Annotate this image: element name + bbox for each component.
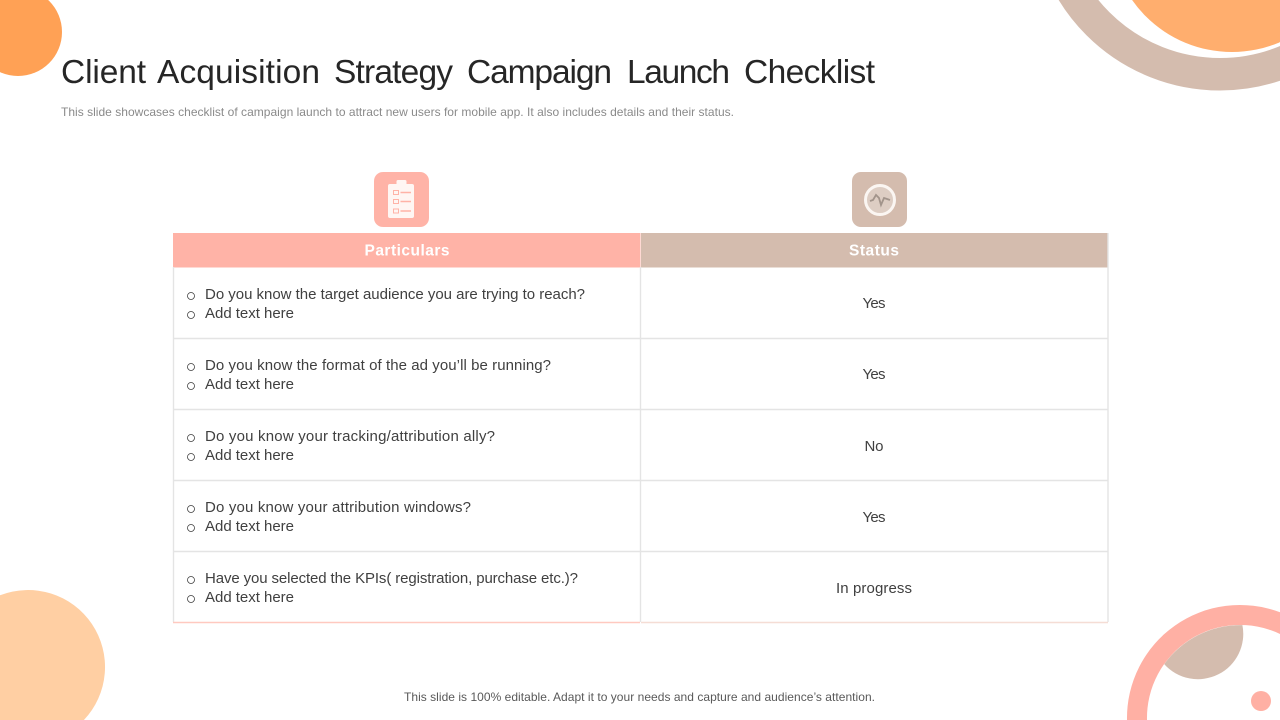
row 5: Add text here	[205, 589, 294, 606]
title: Campaign	[467, 54, 612, 91]
row 1: Yes	[862, 295, 886, 312]
title: Acquisition	[157, 54, 320, 91]
decoration: bottom-right small pink dot	[1251, 691, 1271, 711]
row 1	[188, 286, 886, 322]
title: Client	[61, 54, 147, 91]
row 1: Do you know the target audience you are trying to reach?	[205, 286, 585, 303]
row 2: Do you know the format of the ad you’ll be running?	[205, 357, 551, 374]
row 2	[188, 357, 886, 393]
row 4	[188, 499, 886, 535]
row 2: Add text here	[205, 376, 294, 393]
decoration: top-left orange circle	[0, 0, 62, 76]
row 3: Do you know your tracking/attribution ally?	[205, 428, 495, 445]
decoration: bottom-right pink ring	[1127, 605, 1280, 720]
row 1: Add text here	[205, 305, 294, 322]
footer note: This slide is 100% editable. Adapt it to your needs and capture and audience’s attention.	[404, 690, 875, 704]
decoration: bottom-left peach circle	[0, 590, 105, 720]
row 3: Add text here	[205, 447, 294, 464]
decoration: bottom-right tan circle	[1164, 625, 1243, 679]
decoration: top-right orange circle	[1110, 0, 1280, 52]
subtitle: This slide showcases checklist of campaign launch to attract new users for mobile app. It also includes details and their status.	[61, 105, 734, 119]
row 4: Yes	[862, 509, 886, 526]
title: Launch	[627, 54, 730, 91]
row 4: Do you know your attribution windows?	[205, 499, 471, 516]
row 4: Add text here	[205, 518, 294, 535]
icon: status pulse	[852, 172, 907, 227]
row 5: Have you selected the KPIs( registration, purchase etc.)?	[205, 570, 578, 587]
table header: Status: Status	[849, 242, 899, 260]
title: Strategy	[334, 54, 453, 91]
icon: clipboard checklist	[374, 172, 429, 227]
row 5	[188, 570, 912, 606]
table header: Status	[641, 233, 1108, 268]
row 3	[188, 428, 884, 464]
row 5: In progress	[836, 580, 912, 597]
table header: Particulars: Particulars	[364, 242, 450, 260]
decoration: top-right tan ring	[1047, 0, 1280, 74]
table grid lines	[173, 233, 1108, 622]
table header: Particulars	[173, 233, 640, 268]
row 3: No	[864, 438, 884, 455]
row 2: Yes	[862, 366, 886, 383]
table	[173, 233, 1108, 622]
title: Checklist	[744, 54, 876, 91]
